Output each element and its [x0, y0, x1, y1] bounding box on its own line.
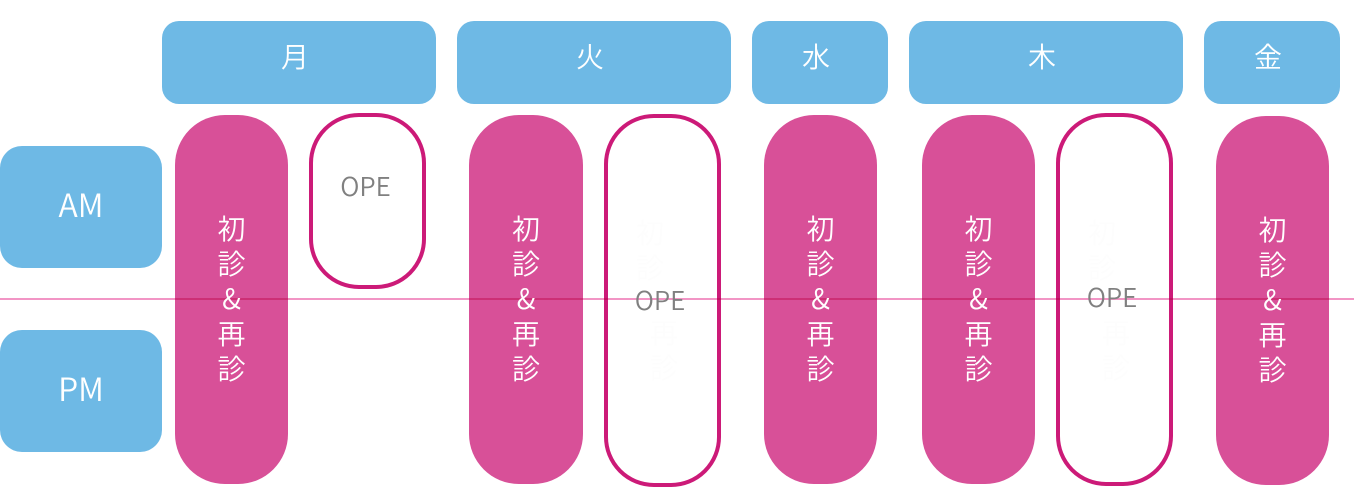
Monday OPE pill — [309, 113, 426, 289]
Monday consultation pill: 初 — [217, 208, 246, 248]
schedule infographic: 診 — [1102, 347, 1130, 387]
header: Wednesday — [752, 21, 888, 104]
header: Tuesday — [457, 21, 731, 104]
schedule infographic: 再 — [1102, 312, 1130, 352]
header: Friday: 金 — [1254, 36, 1282, 76]
row label: PM: PM — [58, 365, 104, 411]
Friday consultation pill: 初 — [1258, 209, 1286, 249]
Tuesday consultation pill: & — [517, 278, 535, 318]
header: Thursday — [909, 21, 1183, 104]
schedule infographic: 診 — [1088, 247, 1116, 287]
Thursday OPE pill — [1056, 113, 1173, 486]
header: Wednesday: 水 — [802, 36, 830, 76]
Thursday consultation pill: 再 — [964, 313, 992, 353]
Thursday consultation pill: & — [969, 278, 988, 318]
Wednesday consultation pill — [764, 115, 877, 484]
Friday consultation pill: 診 — [1258, 349, 1286, 389]
schedule infographic: 再 — [650, 312, 678, 352]
schedule infographic: 初 — [1088, 212, 1116, 252]
schedule infographic: 診 — [650, 347, 678, 387]
Friday consultation pill: 再 — [1258, 314, 1286, 354]
noon divider line — [0, 298, 1354, 300]
Thursday consultation pill: 診 — [964, 243, 992, 283]
Wednesday consultation pill: 診 — [806, 348, 834, 388]
Monday consultation pill: 再 — [217, 313, 246, 353]
Tuesday OPE pill — [604, 114, 721, 487]
Tuesday consultation pill: 再 — [512, 313, 540, 353]
Monday consultation pill: 診 — [217, 243, 246, 283]
row label: PM — [0, 330, 162, 452]
schedule infographic: 診 — [636, 247, 664, 287]
header: Thursday: 木 — [1028, 36, 1056, 76]
Monday consultation pill: & — [222, 278, 241, 318]
Tuesday consultation pill — [469, 115, 583, 484]
Tuesday consultation pill: 診 — [512, 348, 540, 388]
Monday consultation pill: 診 — [217, 348, 246, 388]
Tuesday consultation pill: 診 — [512, 243, 540, 283]
Thursday OPE pill: OPE — [1087, 278, 1137, 315]
schedule infographic: 初 — [636, 212, 664, 252]
Thursday consultation pill: 初 — [964, 208, 992, 248]
header: Friday — [1204, 21, 1340, 104]
Friday consultation pill: & — [1263, 279, 1282, 319]
row label: AM — [0, 146, 162, 268]
header: Monday: 月 — [281, 36, 309, 76]
Tuesday OPE pill: OPE — [635, 281, 685, 318]
Wednesday consultation pill: & — [811, 278, 830, 318]
Thursday consultation pill: 診 — [964, 348, 992, 388]
Thursday consultation pill — [922, 115, 1035, 484]
Friday consultation pill — [1216, 116, 1329, 485]
header: Monday — [162, 21, 436, 104]
Monday consultation pill — [175, 115, 288, 484]
Wednesday consultation pill: 再 — [806, 313, 834, 353]
header: Tuesday: 火 — [576, 36, 604, 76]
Friday consultation pill: 診 — [1258, 244, 1286, 284]
Monday OPE pill: OPE — [340, 167, 391, 204]
Wednesday consultation pill: 診 — [806, 243, 834, 283]
Tuesday consultation pill: 初 — [512, 208, 540, 248]
Wednesday consultation pill: 初 — [806, 208, 834, 248]
row label: AM: AM — [58, 181, 104, 227]
